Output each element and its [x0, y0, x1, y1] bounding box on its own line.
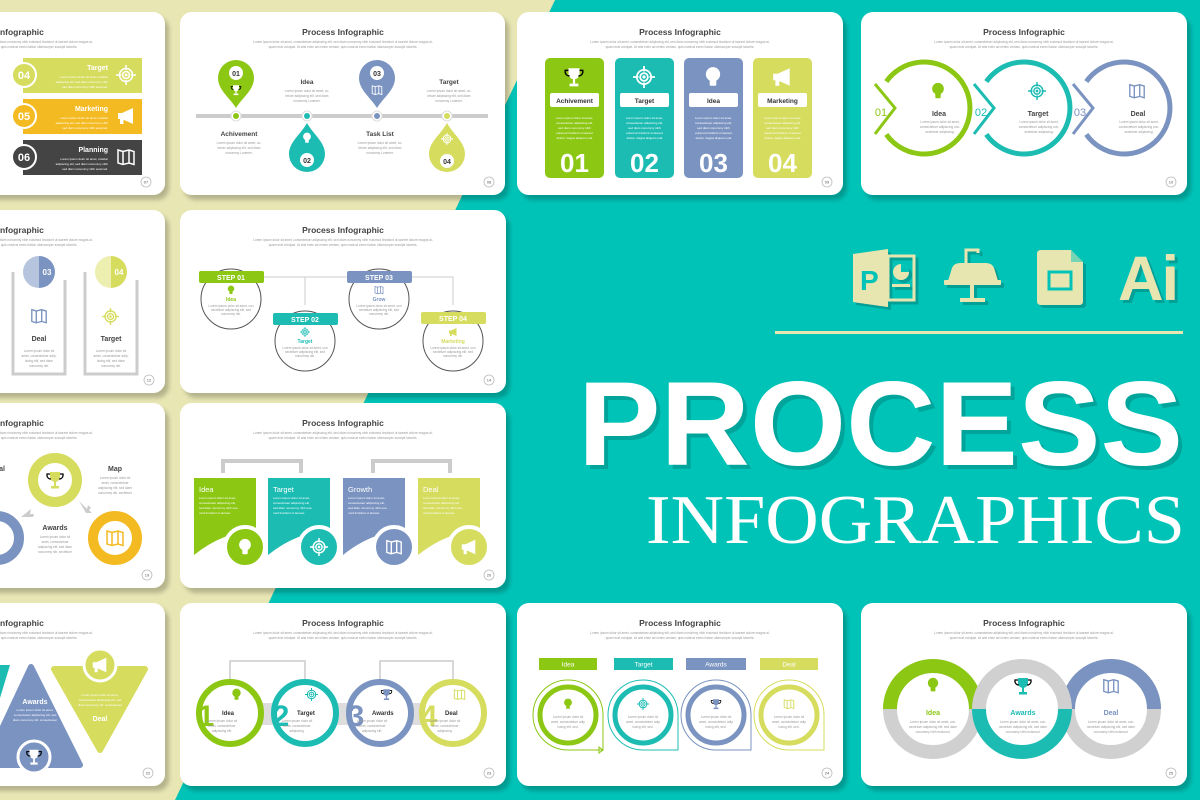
slide card 07: steps list	[0, 12, 165, 195]
slide card 19: ring cycle	[0, 403, 165, 588]
slide card 08: pin timeline: nonummy Loremer.	[435, 99, 463, 103]
slide card 23: numbered rings: amet, consectetuer	[358, 724, 386, 728]
slide card 20: four flag cards: mod tincidunt ut laoreet.	[423, 511, 455, 515]
slide card 08: pin timeline: Target	[439, 79, 460, 86]
slide card 10: chevron circles	[861, 12, 1187, 195]
slide card 09: four columns: euismod tincidunt ut laoreet	[626, 131, 663, 135]
slide card 23: numbered rings: Deal	[445, 711, 458, 717]
slide card 14: step circles: Marketing	[441, 339, 465, 345]
slide card 09: four columns: 02	[630, 148, 659, 178]
slide card 25: interlocking rings: Idea	[926, 710, 940, 717]
slide card 19: ring cycle: 19	[145, 572, 150, 578]
slide card 20: four flag cards: Idea	[199, 485, 214, 494]
slide card 22: triangles	[0, 603, 165, 786]
slide card 19: ring cycle: adipiscing elit, sed diam	[98, 486, 132, 490]
slide card 20: four flag cards: Growth	[348, 485, 372, 494]
slide card 19: ring cycle: Map	[108, 466, 122, 473]
icon: PowerPoint	[853, 249, 914, 307]
slide card 23: numbered rings: Lorem ipsum dolor sit	[430, 719, 460, 723]
slide card 09: four columns: sed diam nonummy nibh	[697, 126, 730, 130]
slide card 08: pin timeline: tetuer adipiscing elit, sed diam	[428, 94, 471, 98]
slide card 12: tab frames: Target	[101, 336, 122, 343]
slide card 25: interlocking rings: 25	[1169, 770, 1174, 776]
slide card 08: pin timeline: Lorem ipsum dolor sit amet, consectetuer adipiscing elit, sed diam nonummy nibh euismod tincidunt ut laoreet dolore magna al-	[253, 40, 433, 44]
slide card 09: four columns: consectetuer adipiscing elit,	[626, 121, 663, 125]
slide card 20: four flag cards: consectetuer adipiscing elit,	[199, 501, 236, 505]
slide card 10: chevron circles: consectetuer adipiscing con-	[1019, 125, 1059, 129]
slide card 08: pin timeline: nonummy Loremer.	[366, 151, 394, 155]
slide card 10: chevron circles: Idea	[932, 111, 946, 118]
slide card 12: tab frames: Lorem ipsum dolor sit	[96, 349, 126, 353]
slide card 08: pin timeline: 02	[303, 158, 311, 165]
slide card 23: numbered rings: Lorem ipsum dolor sit amet, consectetuer adipiscing elit, sed diam nonummy nibh euismod tincidunt ut laoreet dolore magna al-	[253, 631, 433, 635]
slide card 14: step circles: sectetuer adipiscing elit, sed	[359, 308, 399, 312]
slide card 25: interlocking rings: Lorem ipsum dolor sit amet, con-	[1088, 720, 1134, 724]
slide card 24: tags and arrow circles: 24	[825, 770, 830, 776]
slide card 07: steps list: adipiscing elit, sed diam nonummy nibh	[56, 121, 108, 125]
slide card 07: steps list: adipiscing elit, sed diam nonummy nibh	[56, 80, 108, 84]
slide card 07: steps list: Lorem ipsum dolor sit amet, colebar	[60, 157, 108, 161]
slide card 14: step circles	[180, 210, 506, 393]
slide card 20: four flag cards: Process Infographic	[302, 418, 384, 428]
slide card 14: step circles: 14	[487, 378, 492, 382]
slide card 20: four flag cards: sed diam nonummy nibh eus-	[273, 506, 312, 510]
slide card 07: steps list: Lorem ipsum dolor sit amet, colebar	[60, 116, 108, 120]
slide card 12: tab frames: amet, consectetuer adip-	[21, 354, 57, 358]
slide card 23: numbered rings: Awards	[372, 711, 394, 717]
slide card 14: step circles: Lorem ipsum dolor sit amet, con	[208, 304, 254, 308]
slide card 23: numbered rings: 23	[487, 770, 492, 776]
slide card 24: tags and arrow circles: iscing elit, sed.	[633, 725, 654, 729]
slide card 24: tags and arrow circles: amet, consectetuer adip	[772, 720, 806, 724]
slide card 09: four columns: Achivement	[556, 98, 594, 105]
headline: PROCESS: PROCESS	[582, 361, 1187, 495]
slide card 10: chevron circles: consectetuer adipiscing con-	[1119, 125, 1159, 129]
slide card 25: interlocking rings: Process Infographic	[983, 618, 1065, 628]
slide card 19: ring cycle: Lorem ipsum dolor sit	[40, 535, 70, 539]
slide card 10: chevron circles: consectetuer adipiscing con-	[920, 125, 960, 129]
slide card 20: four flag cards: Deal	[423, 485, 439, 494]
slide card 14: step circles: nonummy nib.	[295, 354, 315, 358]
slide card 07: steps list: 05	[18, 111, 30, 123]
slide card 24: tags and arrow circles: Process Infographic	[639, 618, 721, 628]
slide card 22: triangles: 22	[146, 770, 151, 776]
slide card 22: triangles: Deal	[93, 716, 107, 723]
slide card 12: tab frames: Lorem ipsum dolor sit	[24, 349, 54, 353]
slide card 12: tab frames: 12	[147, 378, 152, 382]
slide card 12: tab frames: Deal	[32, 336, 46, 343]
slide card 09: four columns: Target	[635, 98, 655, 105]
slide card 09: four columns: dolore magna aliquam erat	[557, 136, 593, 140]
slide card 20: four flag cards: Lorem ipsum dolor sit amet,	[348, 496, 385, 500]
slide card 09: four columns	[517, 12, 843, 195]
slide card 09: four columns: sed diam nonummy nibh	[558, 126, 591, 130]
software icons row	[853, 244, 1177, 314]
slide card 09: four columns: 04	[768, 148, 797, 178]
slide card 24: tags and arrow circles: amet, consectetuer adip	[626, 720, 660, 724]
slide card 24: tags and arrow circles: iscing elit, sed.	[706, 725, 727, 729]
slide card 24: tags and arrow circles: Lorem ipsum dolor sit	[628, 715, 658, 719]
slide card 24: tags and arrow circles: iscing elit, sed.	[558, 725, 579, 729]
slide card 14: step circles: STEP 01	[217, 275, 245, 282]
slide card 09: four columns: Idea	[707, 98, 720, 105]
slide card 19: ring cycle: nonummy nib. sectetuer	[98, 491, 133, 495]
slide card 23: numbered rings: adipiscing.	[437, 729, 453, 733]
slide card 08: pin timeline: Lorem ipsum dolor sit amet, co-	[285, 89, 329, 93]
slide card 24: tags and arrow circles: quam erat volutpat. Ut wisi enim ad minim veniam, quis nostrud exerci tation ullamcorper suscipit lobortis.	[606, 636, 754, 640]
slide card 07: steps list: Target	[87, 65, 109, 72]
slide card 24: tags and arrow circles: Target	[634, 662, 653, 668]
slide card 20: four flag cards: mod tincidunt ut laoreet.	[199, 511, 231, 515]
slide card 08: pin timeline: 04	[443, 159, 451, 166]
slide card 23: numbered rings: 2	[273, 700, 289, 733]
slide card 07: steps list: sed diam nonummy nibh euismod.	[62, 85, 108, 89]
slide card 09: four columns: Lorem ipsum dolor sit amet,	[695, 116, 732, 120]
slide card 12: tab frames: iscing elit, sed diam	[97, 359, 125, 363]
slide card 14: step circles: STEP 04	[439, 316, 467, 323]
slide card 14: step circles: Lorem ipsum dolor sit amet, con	[356, 304, 402, 308]
slide card 24: tags and arrow circles: Lorem ipsum dolor sit	[553, 715, 583, 719]
slide card 07: steps list: 06	[18, 152, 30, 164]
icon: Illustrator: Ai	[1118, 244, 1177, 314]
slide card 12: tab frames: nonummy nib.	[29, 364, 49, 368]
slide card 08: pin timeline: Achivement	[221, 131, 258, 138]
slide card 25: interlocking rings: Deal	[1104, 710, 1118, 717]
slide card 14: step circles: Target	[298, 339, 313, 345]
slide card 25: interlocking rings: Lorem ipsum dolor sit amet, con-	[910, 720, 956, 724]
slide card 20: four flag cards: Target	[273, 485, 295, 494]
slide card 08: pin timeline	[180, 12, 505, 195]
slide card 23: numbered rings: 3	[348, 700, 364, 733]
slide card 23: numbered rings: 1	[198, 700, 214, 733]
slide card 23: numbered rings: adipiscing elit.	[362, 729, 382, 733]
slide card 10: chevron circles: Target	[1028, 111, 1049, 118]
slide card 20: four flag cards: sed diam nonummy nibh eus-	[423, 506, 462, 510]
slide card 25: interlocking rings: sectetuer adipiscing elit, sed diam	[999, 725, 1047, 729]
slide card 10: chevron circles: sectetuer adipiscing.	[1024, 130, 1054, 134]
slide card 08: pin timeline: Idea	[300, 79, 314, 86]
slide card 09: four columns: 09	[825, 180, 830, 184]
slide card 24: tags and arrow circles: amet, consectetuer adip	[551, 720, 585, 724]
slide card 14: step circles: Lorem ipsum dolor sit amet, consectetuer adipiscing elit, sed diam nonummy nibh euismod tincidunt ut laoreet dolore magna al-	[253, 238, 433, 242]
slide card 25: interlocking rings: nonummy nibh euismod.	[1006, 730, 1040, 734]
slide card 23: numbered rings: Idea	[222, 711, 235, 717]
slide card 22: triangles: consectetuer adipiscing elit, sed	[79, 698, 122, 702]
slide card 09: four columns: consectetuer adipiscing elit,	[695, 121, 732, 125]
slide card 23: numbered rings: Target	[297, 711, 315, 717]
slide card 20: four flag cards: consectetuer adipiscing elit,	[423, 501, 460, 505]
slide card 14: step circles: Idea	[226, 297, 236, 303]
slide card 14: step circles: Grow	[373, 297, 385, 303]
slide card 10: chevron circles: 01	[875, 107, 887, 119]
slide card 08: pin timeline: tetuer adipiscing elit, sed diam	[359, 146, 402, 150]
slide card 23: numbered rings: Lorem ipsum dolor sit	[357, 719, 387, 723]
slide card 07: steps list: sed diam nonummy nibh euismod.	[62, 126, 108, 130]
slide card 23: numbered rings	[180, 603, 506, 786]
slide card 09: four columns: Marketing	[767, 98, 798, 105]
slide card 24: tags and arrow circles: Lorem ipsum dolor sit amet, consectetuer adipiscing elit, sed diam nonummy nibh euismod tincidunt ut laoreet dolore magna al-	[590, 631, 770, 635]
slide card 12: tab frames: nonummy nib.	[101, 364, 121, 368]
slide card 07: steps list: Planning	[78, 147, 108, 154]
slide card 08: pin timeline: 08	[487, 180, 492, 184]
slide card 24: tags and arrow circles: iscing elit, sed.	[779, 725, 800, 729]
slide card 22: triangles: Lorem ipsum dolor sit amet,	[81, 693, 119, 697]
slide card 24: tags and arrow circles: Lorem ipsum dolor sit	[774, 715, 804, 719]
slide card 20: four flag cards	[180, 403, 506, 588]
slide card 20: four flag cards: Lorem ipsum dolor sit amet,	[273, 496, 310, 500]
slide card 07: steps list: Lorem ipsum dolor sit amet, colebar	[60, 75, 108, 79]
divider line	[775, 331, 1183, 334]
slide card 09: four columns: euismod tincidunt ut laoreet	[764, 131, 801, 135]
slide card 07: steps list: sed diam nonummy nibh euismod.	[62, 167, 108, 171]
slide card 14: step circles: Lorem ipsum dolor sit amet, con	[430, 346, 476, 350]
slide card 22: triangles: consectetuer adipiscing elit, sed	[14, 713, 57, 717]
slide card 10: chevron circles: sectetuer adipiscing.	[1124, 130, 1154, 134]
slide card 14: step circles: nonummy nib.	[369, 312, 389, 316]
slide card 09: four columns: dolore magna aliquam erat	[765, 136, 801, 140]
slide card 09: four columns: Process Infographic	[639, 27, 721, 37]
slide card 25: interlocking rings: sectetuer adipiscing elit, sed diam	[909, 725, 957, 729]
slide card 09: four columns: 01	[560, 148, 589, 178]
slide card 23: numbered rings: Lorem ipsum dolor sit	[282, 719, 312, 723]
slide card 19: ring cycle: adipiscing elit, sed diam	[38, 545, 72, 549]
slide card 14: step circles: STEP 03	[365, 275, 393, 282]
slide card 25: interlocking rings: nonummy nibh euismod.	[1094, 730, 1128, 734]
slide card 07: steps list: 04	[18, 70, 31, 82]
slide card 25: interlocking rings: sectetuer adipiscing elit, sed diam	[1087, 725, 1135, 729]
slide card 09: four columns: euismod tincidunt ut laoreet	[556, 131, 593, 135]
slide card 20: four flag cards: consectetuer adipiscing elit,	[348, 501, 385, 505]
background: cream diagonal	[0, 0, 555, 800]
slide card 20: four flag cards: Lorem ipsum dolor sit amet, consectetuer adipiscing elit, sed diam nonummy nibh euismod tincidunt ut laoreet dolore magna al-	[253, 431, 433, 435]
slide card 09: four columns: Lorem ipsum dolor sit amet,	[626, 116, 663, 120]
slide card 09: four columns: sed diam nonummy nibh	[628, 126, 661, 130]
slide card 07: steps list: 07	[144, 180, 149, 184]
slide card 12: tab frames	[0, 210, 165, 393]
slide card 12: tab frames: 04	[115, 268, 124, 277]
slide card 20: four flag cards: quam erat volutpat. Ut wisi enim ad minim veniam, quis nostrud exerci tation ullamcorper suscipit lobortis.	[269, 436, 417, 440]
slide card 22: triangles: Awards	[22, 699, 48, 706]
slide card 24: tags and arrow circles: Deal	[782, 662, 796, 668]
slide card 23: numbered rings: Process Infographic	[302, 618, 384, 628]
slide card 08: pin timeline: nonummy Loremer.	[293, 99, 321, 103]
slide card 20: four flag cards: mod tincidunt ut laoreet.	[273, 511, 305, 515]
slide card 20: four flag cards: mod tincidunt ut laoreet.	[348, 511, 380, 515]
slide card 10: chevron circles: quam erat volutpat. Ut wisi enim ad minim veniam, quis nostrud exerci tation ullamcorper suscipit lobortis.	[950, 45, 1098, 49]
slide card 12: tab frames: iscing elit, sed diam	[25, 359, 53, 363]
slide card 23: numbered rings: 4	[421, 700, 438, 733]
slide card 25: interlocking rings: Lorem ipsum dolor sit amet, consectetuer adipiscing elit, sed diam nonummy nibh euismod tincidunt ut laoreet dolore magna al-	[934, 631, 1114, 635]
slide card 09: four columns: 03	[699, 148, 728, 178]
headline: PROCESS: PROCESS	[578, 357, 1183, 491]
slide card 23: numbered rings: adipiscing elit.	[212, 729, 232, 733]
slide card 09: four columns: dolore magna aliquam erat	[627, 136, 663, 140]
slide card 23: numbered rings: adipiscing.	[289, 729, 305, 733]
slide card 08: pin timeline: tetuer adipiscing elit, sed diam	[286, 94, 329, 98]
slide card 23: numbered rings: amet, consectetuer	[208, 724, 236, 728]
slide card 10: chevron circles: Lorem ipsum dolor sit amet,	[920, 120, 960, 124]
icon: Google Slides	[1037, 250, 1083, 305]
slide card 10: chevron circles: Lorem ipsum dolor sit amet,	[1119, 120, 1159, 124]
slide card 10: chevron circles: sectetuer adipiscing.	[925, 130, 955, 134]
slide card 14: step circles: Process Infographic	[302, 225, 384, 235]
slide card 12: tab frames: amet, consectetuer adip-	[93, 354, 129, 358]
slide card 20: four flag cards: sed diam nonummy nibh eus-	[199, 506, 238, 510]
slide card 22: triangles: Lorem ipsum dolor sit amet,	[16, 708, 54, 712]
slide card 24: tags and arrow circles: Lorem ipsum dolor sit	[701, 715, 731, 719]
slide card 14: step circles: nonummy nib.	[221, 312, 241, 316]
slide card 09: four columns: quam erat volutpat. Ut wisi enim ad minim veniam, quis nostrud exerci tation ullamcorper suscipit lobortis.	[606, 45, 754, 49]
slide card 19: ring cycle: amet, consectetuer	[101, 481, 129, 485]
slide card 09: four columns: consectetuer adipiscing elit,	[764, 121, 801, 125]
slide card 10: chevron circles: 02	[975, 107, 987, 119]
slide card 20: four flag cards: sed diam nonummy nibh eus-	[348, 506, 387, 510]
slide card 20: four flag cards: Lorem ipsum dolor sit amet,	[199, 496, 236, 500]
slide card 24: tags and arrow circles: amet, consectetuer adip	[699, 720, 733, 724]
slide card 10: chevron circles: Deal	[1131, 111, 1145, 118]
slide card 14: step circles: STEP 02	[291, 317, 319, 324]
slide card 08: pin timeline: Lorem ipsum dolor sit amet, co-	[358, 141, 402, 145]
slide card 20: four flag cards: 20	[487, 572, 492, 578]
slide card 25: interlocking rings: quam erat volutpat. Ut wisi enim ad minim veniam, quis nostrud exerci tation ullamcorper suscipit lobortis.	[950, 636, 1098, 640]
slide card 08: pin timeline: nonummy Loremer.	[225, 151, 253, 155]
slide card 19: ring cycle: amet, consectetuer	[41, 540, 69, 544]
slide card 22: triangles: diam nonummy nib. consectetuer	[13, 718, 57, 722]
slide card 07: steps list: Marketing	[75, 106, 108, 113]
slide card 14: step circles: nonummy nib.	[443, 354, 463, 358]
slide card 08: pin timeline: 01	[232, 71, 240, 78]
slide card 23: numbered rings: quam erat volutpat. Ut wisi enim ad minim veniam, quis nostrud exerci tation ullamcorper suscipit lobortis.	[269, 636, 417, 640]
slide card 09: four columns: Lorem ipsum dolor sit amet,	[764, 116, 801, 120]
slide card 10: chevron circles: 10	[1169, 180, 1174, 184]
slide card 12: tab frames: 03	[43, 268, 52, 277]
slide card 09: four columns: dolore magna aliquam erat	[696, 136, 732, 140]
slide card 08: pin timeline: quam erat volutpat. Ut wisi enim ad minim veniam, quis nostrud exerci tation ullamcorper suscipit lobortis.	[269, 45, 417, 49]
slide card 09: four columns: Lorem ipsum dolor sit amet, consectetuer adipiscing elit, sed diam nonummy nibh euismod tincidunt ut laoreet dolore magna al-	[590, 40, 770, 44]
slide card 25: interlocking rings: nonummy nibh euismod.	[916, 730, 950, 734]
slide card 20: four flag cards: Lorem ipsum dolor sit amet,	[423, 496, 460, 500]
slide card 10: chevron circles: Process Infographic	[983, 27, 1065, 37]
slide card 14: step circles: quam erat volutpat. Ut wisi enim ad minim veniam, quis nostrud exerci tation ullamcorper suscipit lobortis.	[269, 243, 417, 247]
slide card 24: tags and arrow circles: Idea	[562, 662, 575, 668]
slide card 14: step circles: sectetuer adipiscing elit, sed	[433, 350, 473, 354]
slide card 19: ring cycle: nonummy nib. sectetuer	[38, 550, 73, 554]
slide card 24: tags and arrow circles	[517, 603, 843, 786]
slide card 10: chevron circles: 03	[1074, 107, 1086, 119]
slide card 08: pin timeline: 03	[373, 71, 381, 78]
slide card 20: four flag cards: consectetuer adipiscing elit,	[273, 501, 310, 505]
icon: Keynote	[944, 250, 1001, 302]
slide card 08: pin timeline: tetuer adipiscing elit, sed diam	[218, 146, 261, 150]
slide card 08: pin timeline: Process Infographic	[302, 27, 384, 37]
slide card 08: pin timeline: Lorem ipsum dolor sit amet, co-	[427, 89, 471, 93]
slide card 25: interlocking rings: Lorem ipsum dolor sit amet, con-	[1000, 720, 1046, 724]
subheadline: INFOGRAPHICS: INFOGRAPHICS	[646, 482, 1185, 559]
slide card 10: chevron circles: Lorem ipsum dolor sit amet,	[1019, 120, 1059, 124]
slide card 23: numbered rings: amet, consectetuer	[283, 724, 311, 728]
slide card 24: tags and arrow circles: Awards	[705, 662, 728, 668]
slide card 09: four columns: Lorem ipsum dolor sit amet,	[556, 116, 593, 120]
slide card 10: chevron circles: Lorem ipsum dolor sit amet, consectetuer adipiscing elit, sed diam nonummy nibh euismod tincidunt ut laoreet dolore magna al-	[934, 40, 1114, 44]
slide card 23: numbered rings: amet, consectetuer	[431, 724, 459, 728]
slide card 09: four columns: sed diam nonummy nibh	[766, 126, 799, 130]
slide card 25: interlocking rings: Awards	[1010, 710, 1036, 717]
slide card 07: steps list: adipiscing elit, sed diam nonummy nibh	[56, 162, 108, 166]
slide card 09: four columns: euismod tincidunt ut laoreet	[695, 131, 732, 135]
slide card 25: interlocking rings	[861, 603, 1187, 786]
slide card 19: ring cycle: Awards	[42, 525, 68, 532]
slide card 19: ring cycle: Lorem ipsum dolor sit	[100, 476, 130, 480]
slide card 22: triangles: diam nonummy nib. consectetuer	[78, 703, 122, 707]
slide card 23: numbered rings: Lorem ipsum dolor sit	[207, 719, 237, 723]
slide card 08: pin timeline: Task List	[366, 131, 395, 138]
slide card 14: step circles: Lorem ipsum dolor sit amet, con	[282, 346, 328, 350]
icon: PowerPoint: P	[860, 265, 879, 296]
slide card 14: step circles: sectetuer adipiscing elit, sed	[211, 308, 251, 312]
slide card 08: pin timeline: Lorem ipsum dolor sit amet, co-	[217, 141, 261, 145]
slide card 14: step circles: sectetuer adipiscing elit, sed	[285, 350, 325, 354]
slide card 09: four columns: consectetuer adipiscing elit,	[556, 121, 593, 125]
